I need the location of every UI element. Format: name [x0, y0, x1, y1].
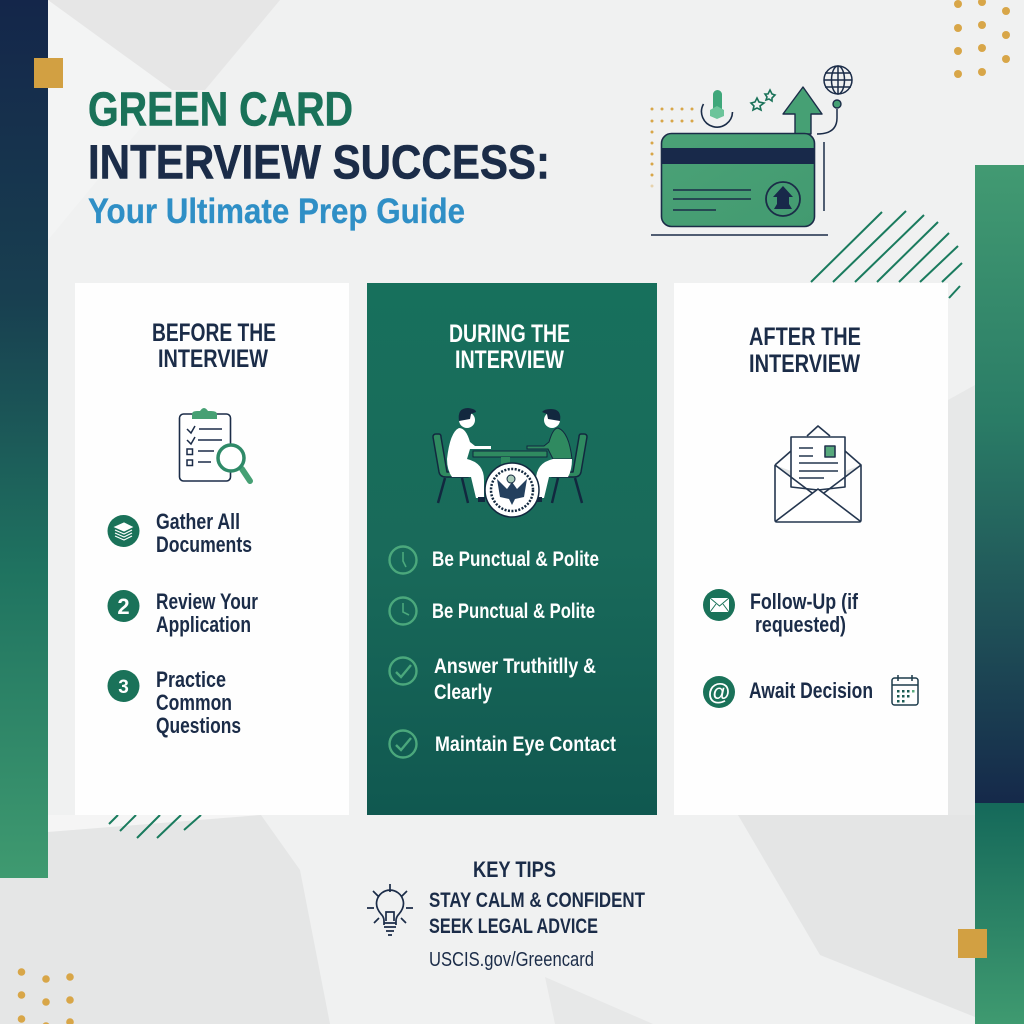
heading: during — [449, 320, 570, 374]
decorative stripes top right — [811, 211, 962, 298]
list item: punctual 1: Be Punctual & Polite — [432, 547, 599, 571]
list item: punctual 1 — [390, 546, 599, 574]
key tips — [429, 857, 645, 971]
list item: practice questions: Common — [156, 690, 232, 715]
panel: during the interview — [367, 283, 657, 815]
heading: before: BEFORE THE — [152, 319, 276, 347]
gold dots top right — [954, 0, 1010, 78]
right gradient bar — [975, 165, 1024, 1024]
list item: review application: Review Your — [156, 589, 258, 614]
list item: review application: 2 — [117, 594, 130, 619]
gold dots bottom left — [18, 968, 74, 1024]
list item: follow-up: Follow-Up (if — [750, 589, 859, 614]
list item: gather documents: Documents — [156, 532, 252, 557]
key tips: USCIS.gov/Greencard — [429, 949, 594, 971]
title: INTERVIEW SUCCESS: — [88, 136, 550, 190]
list item: eye contact — [390, 730, 616, 758]
list item: review application: Application — [156, 612, 251, 637]
icon: light bulb — [367, 884, 413, 935]
title: Your Ultimate Prep Guide — [88, 192, 465, 231]
gold square top left — [34, 58, 63, 88]
icon: calendar — [892, 675, 918, 705]
list item: await decision: Await Decision — [749, 678, 873, 703]
gold square bottom right — [958, 929, 987, 958]
panel: before the interview — [75, 283, 349, 815]
key tips: KEY TIPS — [473, 857, 556, 882]
list item: practice questions: Practice — [156, 667, 226, 692]
icon: clipboard and magnifier — [180, 408, 250, 481]
list item: practice questions: Questions — [156, 713, 241, 738]
list item: practice questions: 3 — [118, 677, 129, 698]
key tips: STAY CALM & CONFIDENT — [429, 889, 645, 912]
list item: await decision — [703, 676, 873, 708]
key tips: SEEK LEGAL ADVICE — [429, 915, 598, 938]
heading: after: AFTER THE — [749, 323, 861, 351]
list item: gather documents: Gather All — [156, 509, 240, 534]
list item: answer truthfully: Clearly — [434, 680, 492, 704]
list item: follow-up: requested) — [755, 612, 846, 637]
list item: eye contact: Maintain Eye Contact — [435, 732, 616, 756]
left gradient bar — [0, 0, 48, 878]
list item: await decision: @ — [708, 679, 730, 705]
heading: after: INTERVIEW — [749, 350, 860, 378]
heading: before — [152, 319, 276, 373]
icon: green card illustration — [650, 66, 852, 235]
list item: answer truthfully — [390, 654, 596, 704]
heading: after — [749, 323, 861, 378]
list item: gather documents — [108, 509, 252, 557]
decorative stripes under first card — [109, 815, 201, 838]
list item: practice questions — [108, 667, 241, 738]
list item: punctual 2: Be Punctual & Polite — [432, 599, 595, 623]
icon: open envelope with letter — [775, 426, 861, 522]
panel: after the interview — [674, 283, 948, 815]
list item: review application — [108, 589, 258, 637]
icon: two people at table with seal — [433, 408, 587, 517]
title: GREEN CARD — [88, 84, 353, 136]
list item: punctual 2 — [390, 598, 595, 624]
list item: answer truthfully: Answer Truthitlly & — [434, 654, 596, 678]
heading: during: INTERVIEW — [455, 346, 564, 374]
heading: before: INTERVIEW — [158, 345, 268, 373]
heading: during: DURING THE — [449, 320, 570, 348]
list item: follow-up — [703, 589, 859, 637]
title — [88, 84, 550, 231]
